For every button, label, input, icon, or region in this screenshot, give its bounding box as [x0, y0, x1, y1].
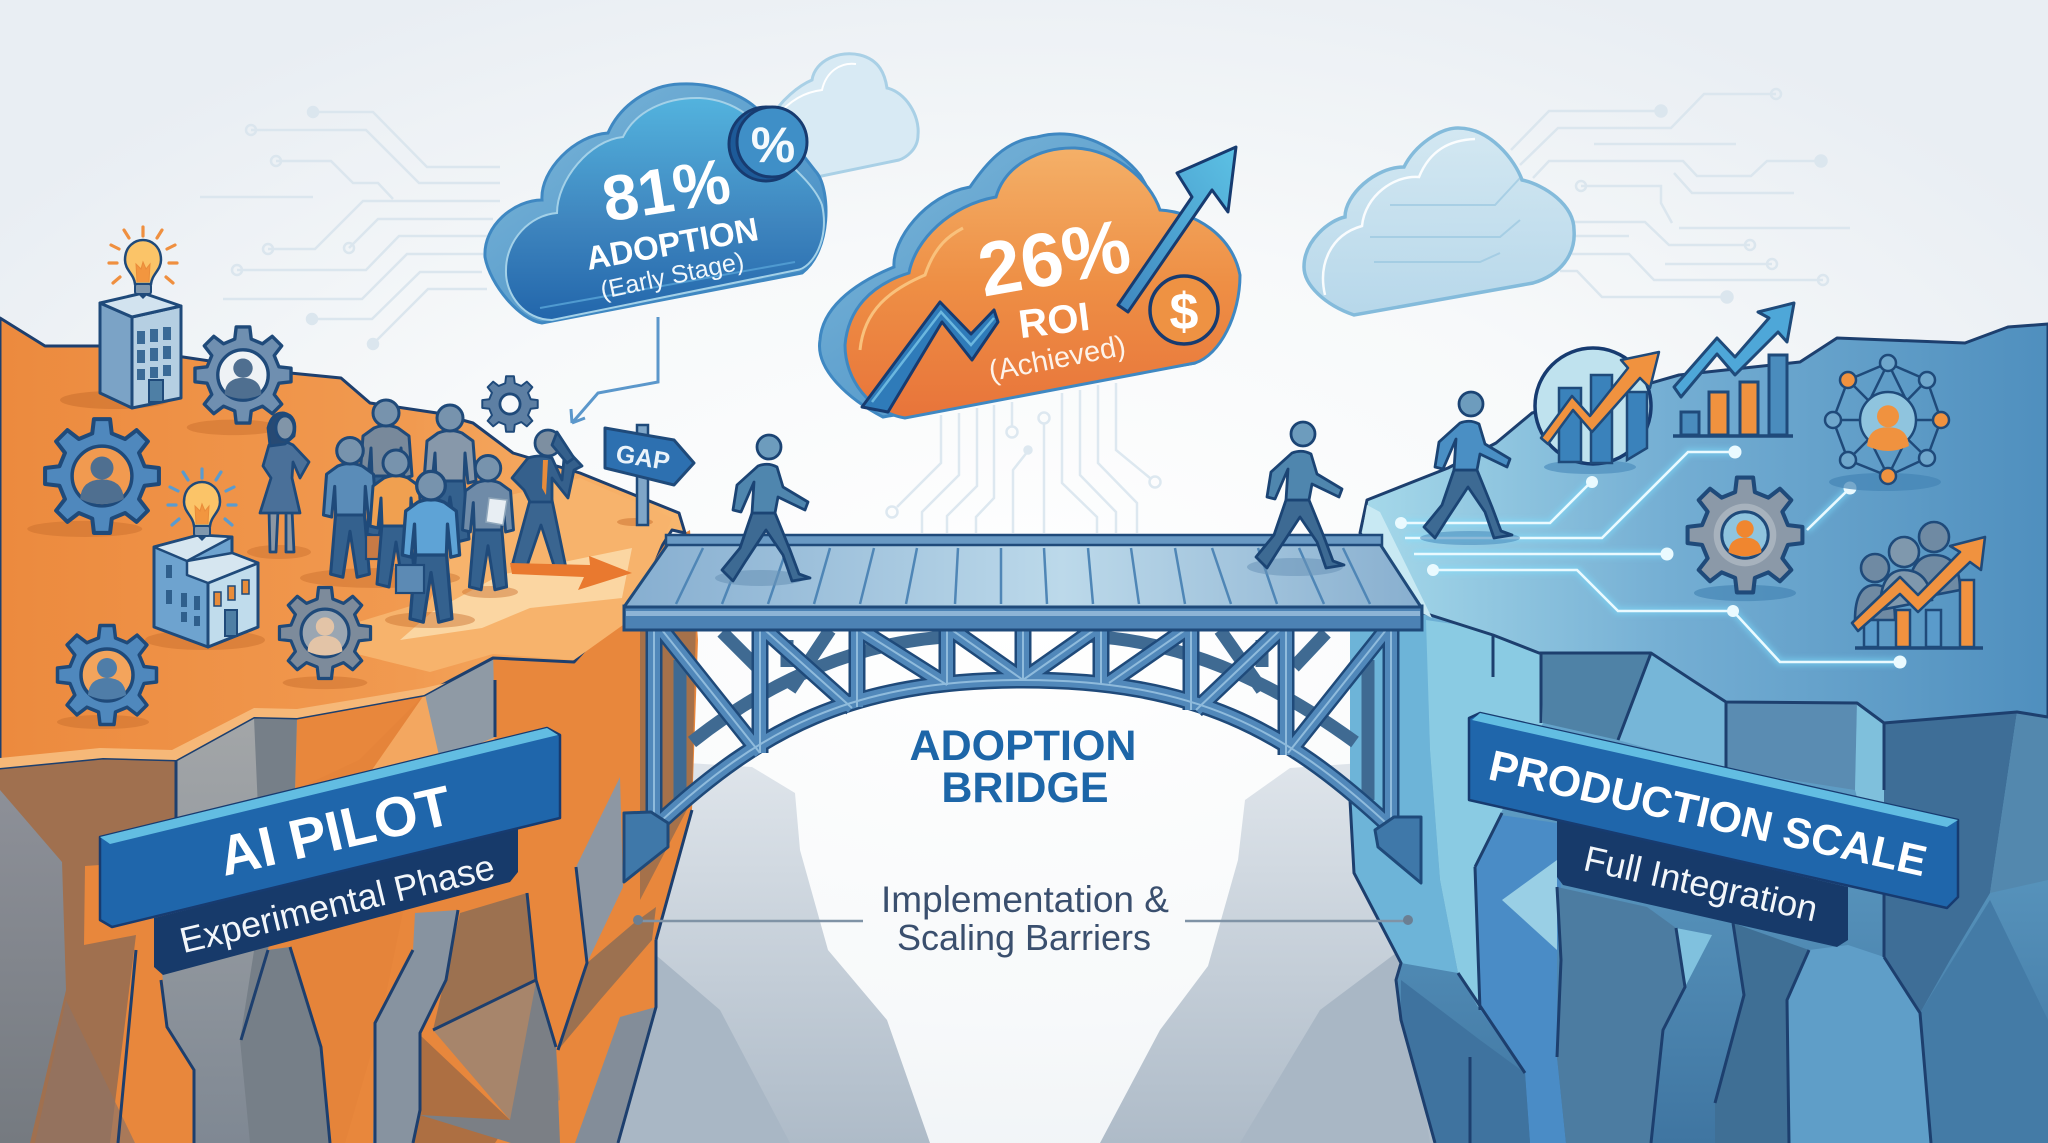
gear bottom left [57, 626, 156, 729]
deck planks [676, 548, 1370, 604]
arrow from adoption cloud to group [571, 317, 658, 423]
person: woman [260, 413, 309, 552]
left abutment [624, 812, 668, 882]
PRODUCTION SCALE sign: PRODUCTION SCALE [1485, 742, 1931, 886]
adoption value: 81% [597, 144, 735, 236]
bridge title: BRIDGE [941, 764, 1109, 812]
orange arrow to bridge [510, 556, 632, 590]
rising arrow [1118, 147, 1236, 312]
bridge title: ADOPTION [910, 722, 1136, 770]
ROI note: (Achieved) [986, 330, 1128, 388]
group of people at the edge [247, 400, 582, 628]
circuit lines under ROI cloud [886, 383, 1160, 533]
person: orange shirt [370, 450, 422, 587]
gear small near group [482, 376, 538, 432]
panel: left orange cliff [0, 318, 698, 1143]
deck fascia [624, 606, 1422, 630]
cliff face [0, 530, 698, 1143]
percent badge [729, 107, 807, 181]
zigzag arrow [862, 302, 998, 412]
person: light blue [402, 471, 460, 622]
person: back grey left [360, 400, 412, 537]
walker on bridge right [1247, 422, 1344, 576]
ROI cloud [820, 134, 1240, 418]
dollar badge [1150, 276, 1218, 344]
subtitle plate [154, 828, 518, 975]
walker on right cliff [1420, 392, 1520, 545]
background ghost cloud left [770, 54, 918, 177]
top surface [1360, 324, 2048, 723]
circuit lines top right [1511, 89, 1850, 302]
AI PILOT sign [100, 728, 560, 975]
circuit glow lines on right plateau [1395, 446, 1906, 668]
panel: right blue cliff [1350, 324, 2048, 1143]
briefcase blue [396, 565, 424, 593]
bar chart with rising arrow icon [1673, 303, 1794, 436]
ROI value: 26% [972, 203, 1137, 314]
ROI label: ROI [1016, 295, 1092, 347]
bridge [624, 535, 1422, 883]
paper [486, 498, 507, 525]
person: back grey right [424, 405, 476, 542]
PRODUCTION SCALE sign: Full Integration [1580, 838, 1822, 929]
chasm mountains [600, 760, 1440, 1143]
walker on bridge left [715, 435, 810, 586]
AI PILOT sign: Experimental Phase [176, 846, 499, 961]
bridge title [910, 722, 1136, 812]
deck rail [666, 535, 1382, 545]
lighter pathway [300, 478, 672, 672]
barriers caption [881, 879, 1169, 958]
barrier leader lines [633, 915, 1413, 925]
gear top [187, 327, 291, 435]
GAP sign: GAP [614, 440, 672, 476]
grey gear with person icon [1688, 478, 1802, 601]
gear left large [27, 419, 159, 537]
crowd shadows [247, 545, 518, 628]
barriers caption: Scaling Barriers [897, 917, 1151, 958]
cliff outlines [1350, 635, 1931, 1143]
network icon [1825, 355, 1949, 491]
person: leader with tie [512, 430, 582, 572]
top surface [0, 318, 685, 768]
building with bulb top left [60, 227, 181, 409]
cliff outlines [118, 680, 692, 1143]
team growth icon [1852, 522, 1985, 648]
person: with paper [463, 456, 513, 590]
barriers caption: Implementation & [881, 879, 1169, 920]
subtitle plate [1557, 820, 1848, 947]
GAP sign [605, 425, 694, 526]
cliff face [1350, 600, 2048, 1143]
circle growth chart icon [1535, 348, 1659, 474]
main plate [100, 728, 560, 927]
briefcase orange [366, 535, 386, 559]
front truss [654, 628, 1391, 822]
AI PILOT sign: AI PILOT [213, 773, 457, 888]
adoption cloud [485, 84, 826, 323]
right abutment [1375, 817, 1421, 883]
building with bulb lower left [145, 469, 265, 650]
deck surface [624, 544, 1421, 607]
circuit lines top left [200, 107, 500, 349]
PRODUCTION SCALE sign [1469, 713, 1958, 947]
adoption label: ADOPTION [583, 210, 761, 277]
background ghost cloud right [1304, 128, 1574, 315]
main plate [1469, 713, 1958, 908]
dollar badge: $ [1170, 283, 1199, 341]
back truss [680, 630, 1368, 800]
adoption note: (Early Stage) [598, 247, 746, 305]
person: blue shirt [323, 437, 377, 577]
gear bottom centre [279, 587, 371, 689]
percent badge: % [751, 117, 795, 173]
